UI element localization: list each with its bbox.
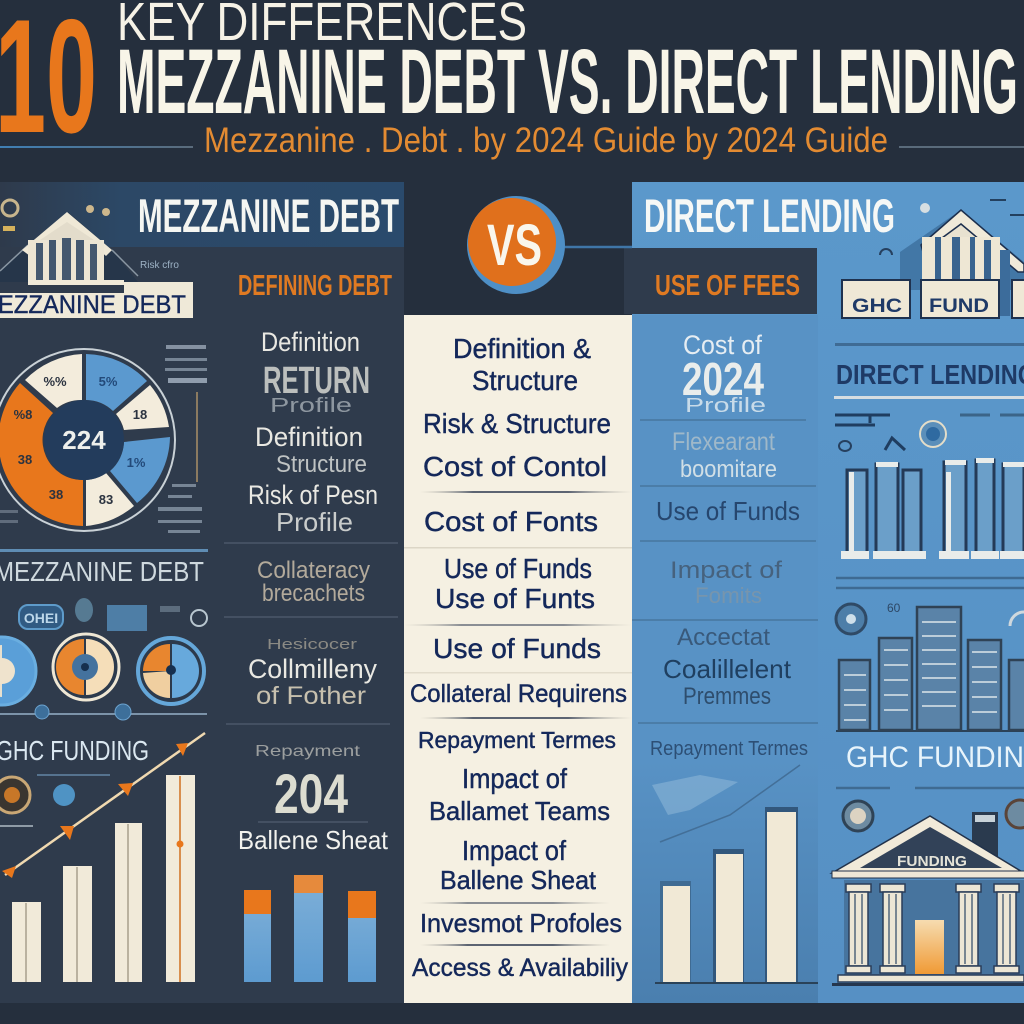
icon: badge circles: [0, 777, 75, 826]
right column text: Premmes: [683, 683, 771, 710]
left column text: 204: [274, 762, 348, 825]
pie segment values: [14, 374, 147, 507]
panel: direct lending (right): [624, 182, 1024, 1003]
column group buildings: [841, 458, 1024, 559]
panel: comparison list (centre): Invesmot Profoles: [420, 908, 622, 938]
pie segment values: 38: [49, 487, 63, 502]
left column text: Definition: [261, 327, 360, 357]
panel: comparison list (centre): Use of Funds: [444, 553, 592, 584]
right column text: Impact of: [670, 557, 782, 584]
bank label: FUNDING: [897, 853, 967, 870]
panel: comparison list (centre): Ballamet Teams: [429, 796, 610, 826]
icon: building ghc fund: [842, 200, 1024, 318]
left column text: Profile: [270, 395, 352, 417]
left header text: MEZZANINE DEBT: [138, 189, 399, 242]
right column text: Coalillelent: [663, 654, 792, 684]
pie segment values: 83: [99, 492, 113, 507]
icon: building with label: Risk cfro: [140, 260, 179, 271]
skyscraper chart: 60: [887, 601, 901, 615]
pie centre value: 224: [62, 425, 106, 455]
pie segment values: 5%: [99, 374, 118, 389]
left column text: Structure: [276, 451, 367, 478]
skyscraper chart: [836, 601, 1024, 731]
right column text: 2024: [682, 353, 764, 405]
left column text: [238, 327, 389, 855]
right dark label: USE OF FEES: [655, 270, 800, 302]
bar chart right: [655, 807, 818, 983]
pie chart: [0, 349, 175, 531]
left header band: [0, 182, 404, 247]
panel: comparison list (centre): Repayment Termes: [418, 727, 616, 753]
stacked bar chart: [244, 875, 376, 982]
pie segment values: 38: [18, 452, 32, 467]
pie segment values: %8: [14, 407, 32, 422]
left column text: Profile: [276, 507, 353, 537]
small icons row: [835, 415, 1024, 451]
left column text: Hesicocer: [267, 636, 357, 653]
right column text: Use of Funds: [656, 496, 800, 526]
left column text: Definition: [255, 422, 363, 452]
left column text: Repayment: [255, 743, 361, 760]
panel: comparison list (centre): Cost of Contol: [423, 451, 607, 482]
left column text: of Fother: [256, 682, 366, 710]
panel: mezzanine debt (left): [0, 182, 404, 1003]
side legend lines: [0, 345, 207, 533]
panel: comparison list (centre): Use of Funts: [435, 583, 595, 614]
gauge 2: [53, 634, 119, 700]
right column text: [650, 330, 808, 760]
pie segment values: 18: [133, 407, 147, 422]
left column text: Ballene Sheat: [238, 825, 389, 855]
panel: comparison list (centre): [404, 315, 632, 1003]
left column text: Collateracy: [257, 557, 370, 584]
ruled caption line: [836, 578, 1024, 588]
subtitle: Mezzanine . Debt . by 2024 Guide by 2024 Guide: [204, 121, 888, 160]
right column text: boomitare: [680, 456, 777, 483]
panel: comparison list (centre): Access & Availabiliy: [412, 954, 628, 982]
gauge icons: [0, 634, 207, 720]
bar chart with trend line: [2, 733, 205, 982]
panel: comparison list (centre): Risk & Structure: [423, 408, 611, 439]
sub-heading: mezzanine debt: MEZZANINE DEBT: [0, 556, 204, 587]
pie segment values: %%: [43, 374, 67, 389]
sub-heading: ghc funding: GHC FUNDING: [0, 735, 149, 766]
left column heading: DEFINING DEBT: [238, 270, 392, 302]
right column text: Fomits: [695, 583, 762, 608]
panel: comparison list (centre): Use of Funds: [433, 633, 601, 664]
panel: comparison list (centre): Cost of Fonts: [424, 506, 598, 537]
left column text: Collmilleny: [248, 654, 377, 684]
left column text: brecachets: [262, 580, 365, 607]
panel: comparison list (centre): Impact of: [462, 763, 567, 794]
building labels: GHC: [852, 296, 902, 317]
icon: bank: [832, 800, 1024, 986]
right column text: Cost of: [683, 330, 762, 360]
right column text: Repayment Termes: [650, 738, 808, 760]
icon row: [19, 598, 207, 631]
panel: comparison list (centre): Impact of: [462, 835, 566, 866]
icon: building ghc fund: FUND: [929, 296, 989, 317]
pie segment values: 1%: [127, 455, 146, 470]
left column text: RETURN: [263, 360, 370, 402]
right column text: Accectat: [677, 624, 770, 651]
left column text: Risk of Pesn: [248, 480, 378, 510]
panel: comparison list (centre): Collateral Requirens: [410, 680, 627, 708]
title block: [0, 0, 1018, 167]
right column text: Flexearant: [672, 428, 775, 456]
gauge 1: [0, 637, 36, 705]
sketch trend line: [652, 765, 800, 842]
icon row: OHEI: [24, 610, 58, 626]
gauge 3: [138, 638, 204, 704]
vs badge: VS: [487, 213, 542, 278]
vs badge: [467, 196, 632, 294]
panel: comparison list (centre): Definition &: [453, 333, 591, 364]
panel: comparison list (centre): Structure: [472, 365, 578, 396]
right column text: Profile: [685, 395, 766, 417]
icon: building with label: [0, 200, 193, 319]
panel: comparison list (centre): Ballene Sheat: [440, 865, 597, 895]
right dark label: [624, 248, 817, 314]
